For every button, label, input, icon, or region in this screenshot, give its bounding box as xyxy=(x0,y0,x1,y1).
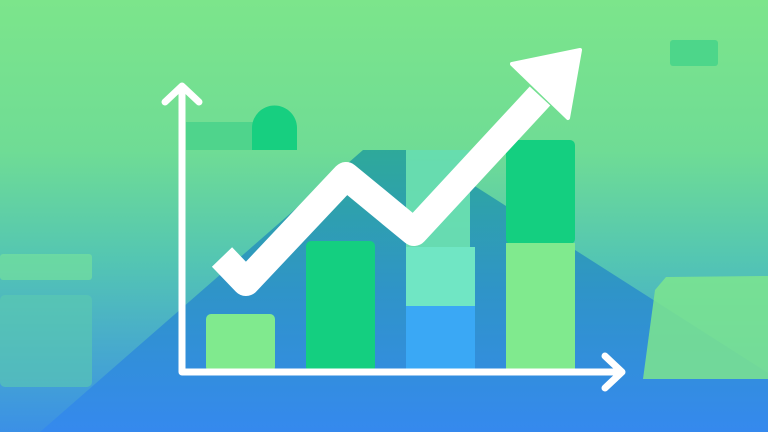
decorative left rects xyxy=(0,254,92,387)
decorative rect top right xyxy=(670,40,718,66)
background mountain shape xyxy=(40,150,768,432)
bars xyxy=(206,140,575,372)
decorative flag shape xyxy=(186,106,297,150)
axes xyxy=(165,86,622,388)
decorative right shape xyxy=(643,276,768,379)
trend arrow xyxy=(222,50,580,282)
